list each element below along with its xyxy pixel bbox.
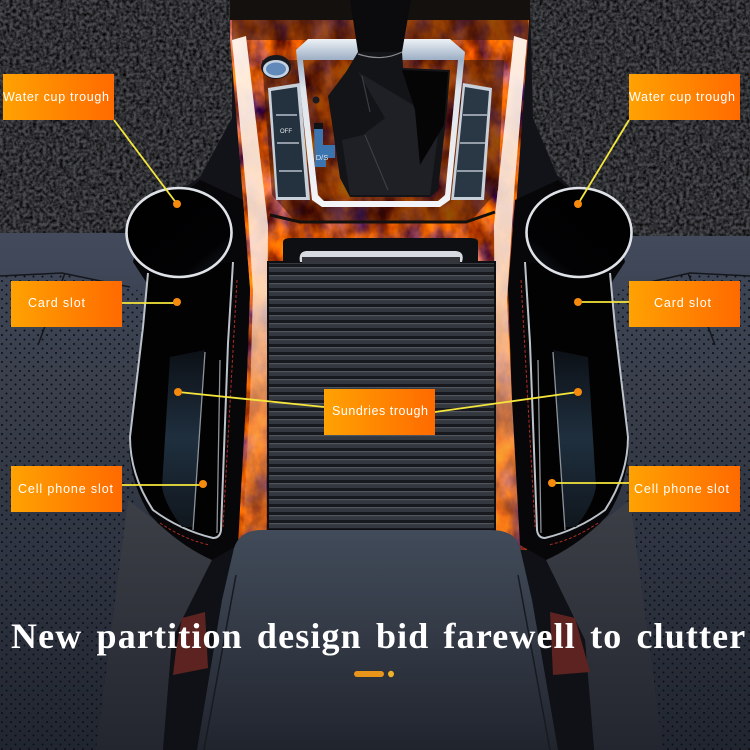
label: water cup trough right: Water cup trough <box>629 90 735 104</box>
right organizer <box>508 180 632 560</box>
left organizer <box>126 180 250 560</box>
gear indicator <box>312 96 335 167</box>
right wood highlight <box>494 36 527 548</box>
label: card slot left <box>11 281 122 327</box>
label: cell phone slot right <box>629 466 740 512</box>
right phone slot panel <box>553 350 596 527</box>
right gap filler with red tab <box>520 540 594 750</box>
label: card slot right <box>629 281 740 327</box>
left tray rim <box>130 262 233 538</box>
right cup holder <box>526 188 632 277</box>
left cup holder <box>126 188 232 277</box>
right carpet <box>530 0 750 236</box>
title: New partition design bid farewell to clutter <box>11 616 746 656</box>
left gap filler with red tab <box>163 540 240 750</box>
label: cell phone slot left: Cell phone slot <box>18 482 114 496</box>
armrest <box>197 530 558 750</box>
right organizer case <box>508 180 629 560</box>
left wood highlight <box>232 36 268 548</box>
decorative pill and dot <box>354 671 394 677</box>
label: sundries trough: Sundries trough <box>332 404 428 418</box>
left switch row <box>268 83 310 200</box>
right seat <box>598 236 750 750</box>
round button <box>261 55 291 79</box>
right divider <box>538 352 565 533</box>
left carpet <box>0 0 232 233</box>
left seat <box>0 233 160 750</box>
right switch row <box>451 83 492 200</box>
right seat bolster <box>546 500 663 750</box>
callout anchor dots <box>173 200 582 488</box>
right stitching <box>521 280 598 545</box>
gear shift panel <box>262 39 504 222</box>
left organizer case <box>129 180 250 560</box>
right tray rim <box>525 262 628 538</box>
gear indicator: D/S <box>316 153 328 162</box>
label: sundries trough <box>324 389 435 435</box>
left divider <box>193 352 220 533</box>
wood centre console <box>230 0 530 550</box>
label: cell phone slot left <box>11 466 122 512</box>
label: cell phone slot right: Cell phone slot <box>634 482 730 496</box>
left phone slot panel <box>162 350 205 527</box>
tambour storage cover <box>268 238 495 530</box>
label: water cup trough left: Water cup trough <box>3 90 109 104</box>
gear boot and knob <box>328 0 450 197</box>
left seat bolster <box>96 500 212 750</box>
left stitching <box>160 280 237 545</box>
label: card slot right: Card slot <box>654 296 712 310</box>
label: water cup trough right <box>629 74 740 120</box>
label: card slot left: Card slot <box>28 296 86 310</box>
label: water cup trough left <box>3 74 114 120</box>
left switch row: OFF <box>280 129 292 135</box>
callout leader lines <box>114 120 629 485</box>
